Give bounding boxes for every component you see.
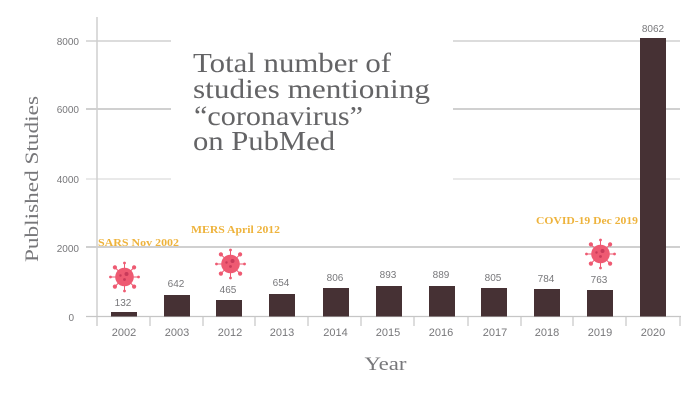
callout: COVID-19: COVID-19 Dec 2019	[536, 215, 639, 227]
x axis	[86, 316, 681, 326]
bar values: 132	[115, 298, 132, 309]
icon: virus MERS	[215, 249, 246, 279]
bar values: 654	[273, 278, 290, 289]
icon: virus SARS	[109, 262, 140, 292]
bar values	[115, 24, 665, 309]
callout: SARS: SARS Nov 2002	[98, 237, 180, 249]
bar values: 642	[168, 279, 185, 290]
title	[193, 47, 430, 156]
title: studies mentioning	[193, 73, 430, 104]
x axis labels: 2003	[165, 327, 189, 339]
y axis	[57, 17, 97, 326]
bar values: 889	[433, 270, 450, 281]
bar values: 893	[380, 270, 397, 281]
y axis labels: 8000	[57, 37, 79, 48]
y axis labels: 6000	[57, 105, 79, 116]
y axis title: Published Studies	[23, 96, 43, 262]
title: “coronavirus”	[194, 100, 363, 131]
x axis labels	[112, 327, 665, 339]
bar values: 763	[591, 275, 608, 286]
callout: MERS: MERS April 2012	[191, 224, 281, 236]
y axis labels: 0	[68, 313, 74, 324]
bar values: 805	[485, 273, 502, 284]
title: on PubMed	[193, 125, 335, 156]
x axis labels: 2019	[588, 327, 612, 339]
x axis labels: 2013	[270, 327, 294, 339]
x axis labels: 2014	[323, 327, 348, 339]
title: Total number of	[193, 47, 392, 78]
x axis labels: 2002	[112, 327, 136, 339]
x axis labels: 2018	[535, 327, 559, 339]
x axis title: Year	[364, 355, 406, 375]
x axis labels: 2020	[641, 327, 665, 339]
bar values: 465	[220, 285, 237, 296]
bar chart	[111, 38, 666, 316]
x axis labels: 2017	[483, 327, 507, 339]
y axis labels: 2000	[57, 244, 79, 255]
bar values: 806	[327, 273, 344, 284]
x axis labels: 2016	[429, 327, 453, 339]
bar values: 784	[538, 274, 555, 285]
y axis labels: 4000	[57, 175, 79, 186]
y axis labels	[57, 37, 79, 324]
bar values: 8062	[642, 24, 665, 35]
grid lines	[86, 41, 680, 247]
x axis labels: 2012	[218, 327, 242, 339]
x axis labels: 2015	[376, 327, 400, 339]
icon: virus COVID-19	[585, 239, 616, 269]
